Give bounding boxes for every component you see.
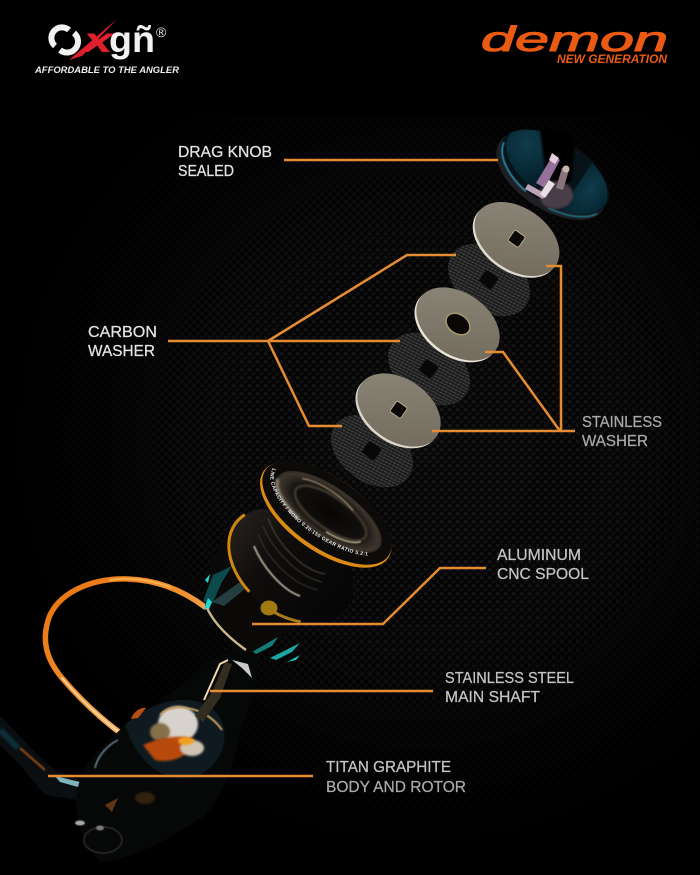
registered mark: ® — [156, 24, 167, 40]
part: carbon washer 1 — [434, 229, 544, 331]
icon: red x — [69, 19, 117, 60]
rotor cup highlights — [125, 700, 224, 778]
logo: demon new generation — [481, 20, 668, 66]
spool base flange — [206, 485, 376, 647]
label: drag knob sealed — [178, 144, 272, 180]
part: stainless washer 2 — [401, 272, 513, 378]
label: stainless washer: STAINLESS — [582, 414, 662, 431]
body shell — [76, 651, 258, 862]
part: aluminum spool — [203, 462, 392, 662]
label: drag knob sealed: SEALED — [178, 163, 234, 180]
logo: demon new generation: demon — [481, 20, 668, 59]
part: carbon washer 3 — [317, 400, 427, 502]
label: aluminum cnc spool: ALUMINUM — [497, 547, 581, 564]
label: titan graphite body and rotor: TITAN GRAPHITE — [326, 759, 451, 776]
label: titan graphite body and rotor: BODY AND ROTOR — [326, 779, 466, 796]
part: carbon washer 2 — [374, 318, 484, 420]
spool brass pin — [260, 600, 278, 616]
part: reel body and rotor — [0, 651, 258, 862]
spool lower skirt with teal fins — [203, 508, 300, 662]
line: carbon washer — [168, 255, 456, 426]
label: stainless steel main shaft: STAINLESS STEEL — [445, 670, 574, 687]
label: carbon washer — [88, 324, 157, 360]
line: drag knob — [284, 159, 498, 161]
part: drag knob — [481, 111, 624, 238]
spool grooves — [254, 518, 325, 596]
label: titan graphite body and rotor — [326, 759, 466, 796]
part: stainless washer 1 — [459, 186, 573, 293]
label: stainless steel main shaft: MAIN SHAFT — [445, 689, 540, 706]
label: stainless washer: WASHER — [582, 433, 648, 450]
icon: broken ring — [51, 27, 78, 53]
logo: demon new generation: NEW GENERATION — [557, 54, 668, 66]
part: bail wire — [45, 579, 205, 747]
label: aluminum cnc spool — [497, 547, 589, 583]
label: stainless washer — [582, 414, 662, 450]
knob handle — [540, 128, 575, 190]
part: stainless washer 3 — [342, 358, 454, 464]
label: stainless steel main shaft — [445, 670, 574, 706]
icon: red x: x — [80, 21, 115, 60]
line: spool — [252, 568, 486, 624]
label: carbon washer: WASHER — [88, 343, 155, 360]
callout lines — [48, 160, 575, 776]
wordmark: gñ — [109, 19, 155, 60]
line: main shaft — [210, 690, 433, 692]
tagline: AFFORDABLE TO THE ANGLER — [34, 65, 179, 76]
rotor arm — [0, 716, 80, 800]
label: aluminum cnc spool: CNC SPOOL — [497, 566, 589, 583]
main shaft — [195, 662, 232, 722]
label: drag knob sealed: DRAG KNOB — [178, 144, 272, 161]
label: carbon washer: CARBON — [88, 324, 157, 341]
line: body — [48, 775, 313, 777]
logo: oxgn brand — [34, 19, 179, 76]
body lower detail — [95, 740, 118, 768]
line: stainless washer — [432, 266, 575, 431]
spool top ring — [260, 462, 392, 568]
ring engraving: LINE CAPACITY / MONO 0.20-150 GEAR RATIO 5.2:1 — [270, 468, 368, 556]
